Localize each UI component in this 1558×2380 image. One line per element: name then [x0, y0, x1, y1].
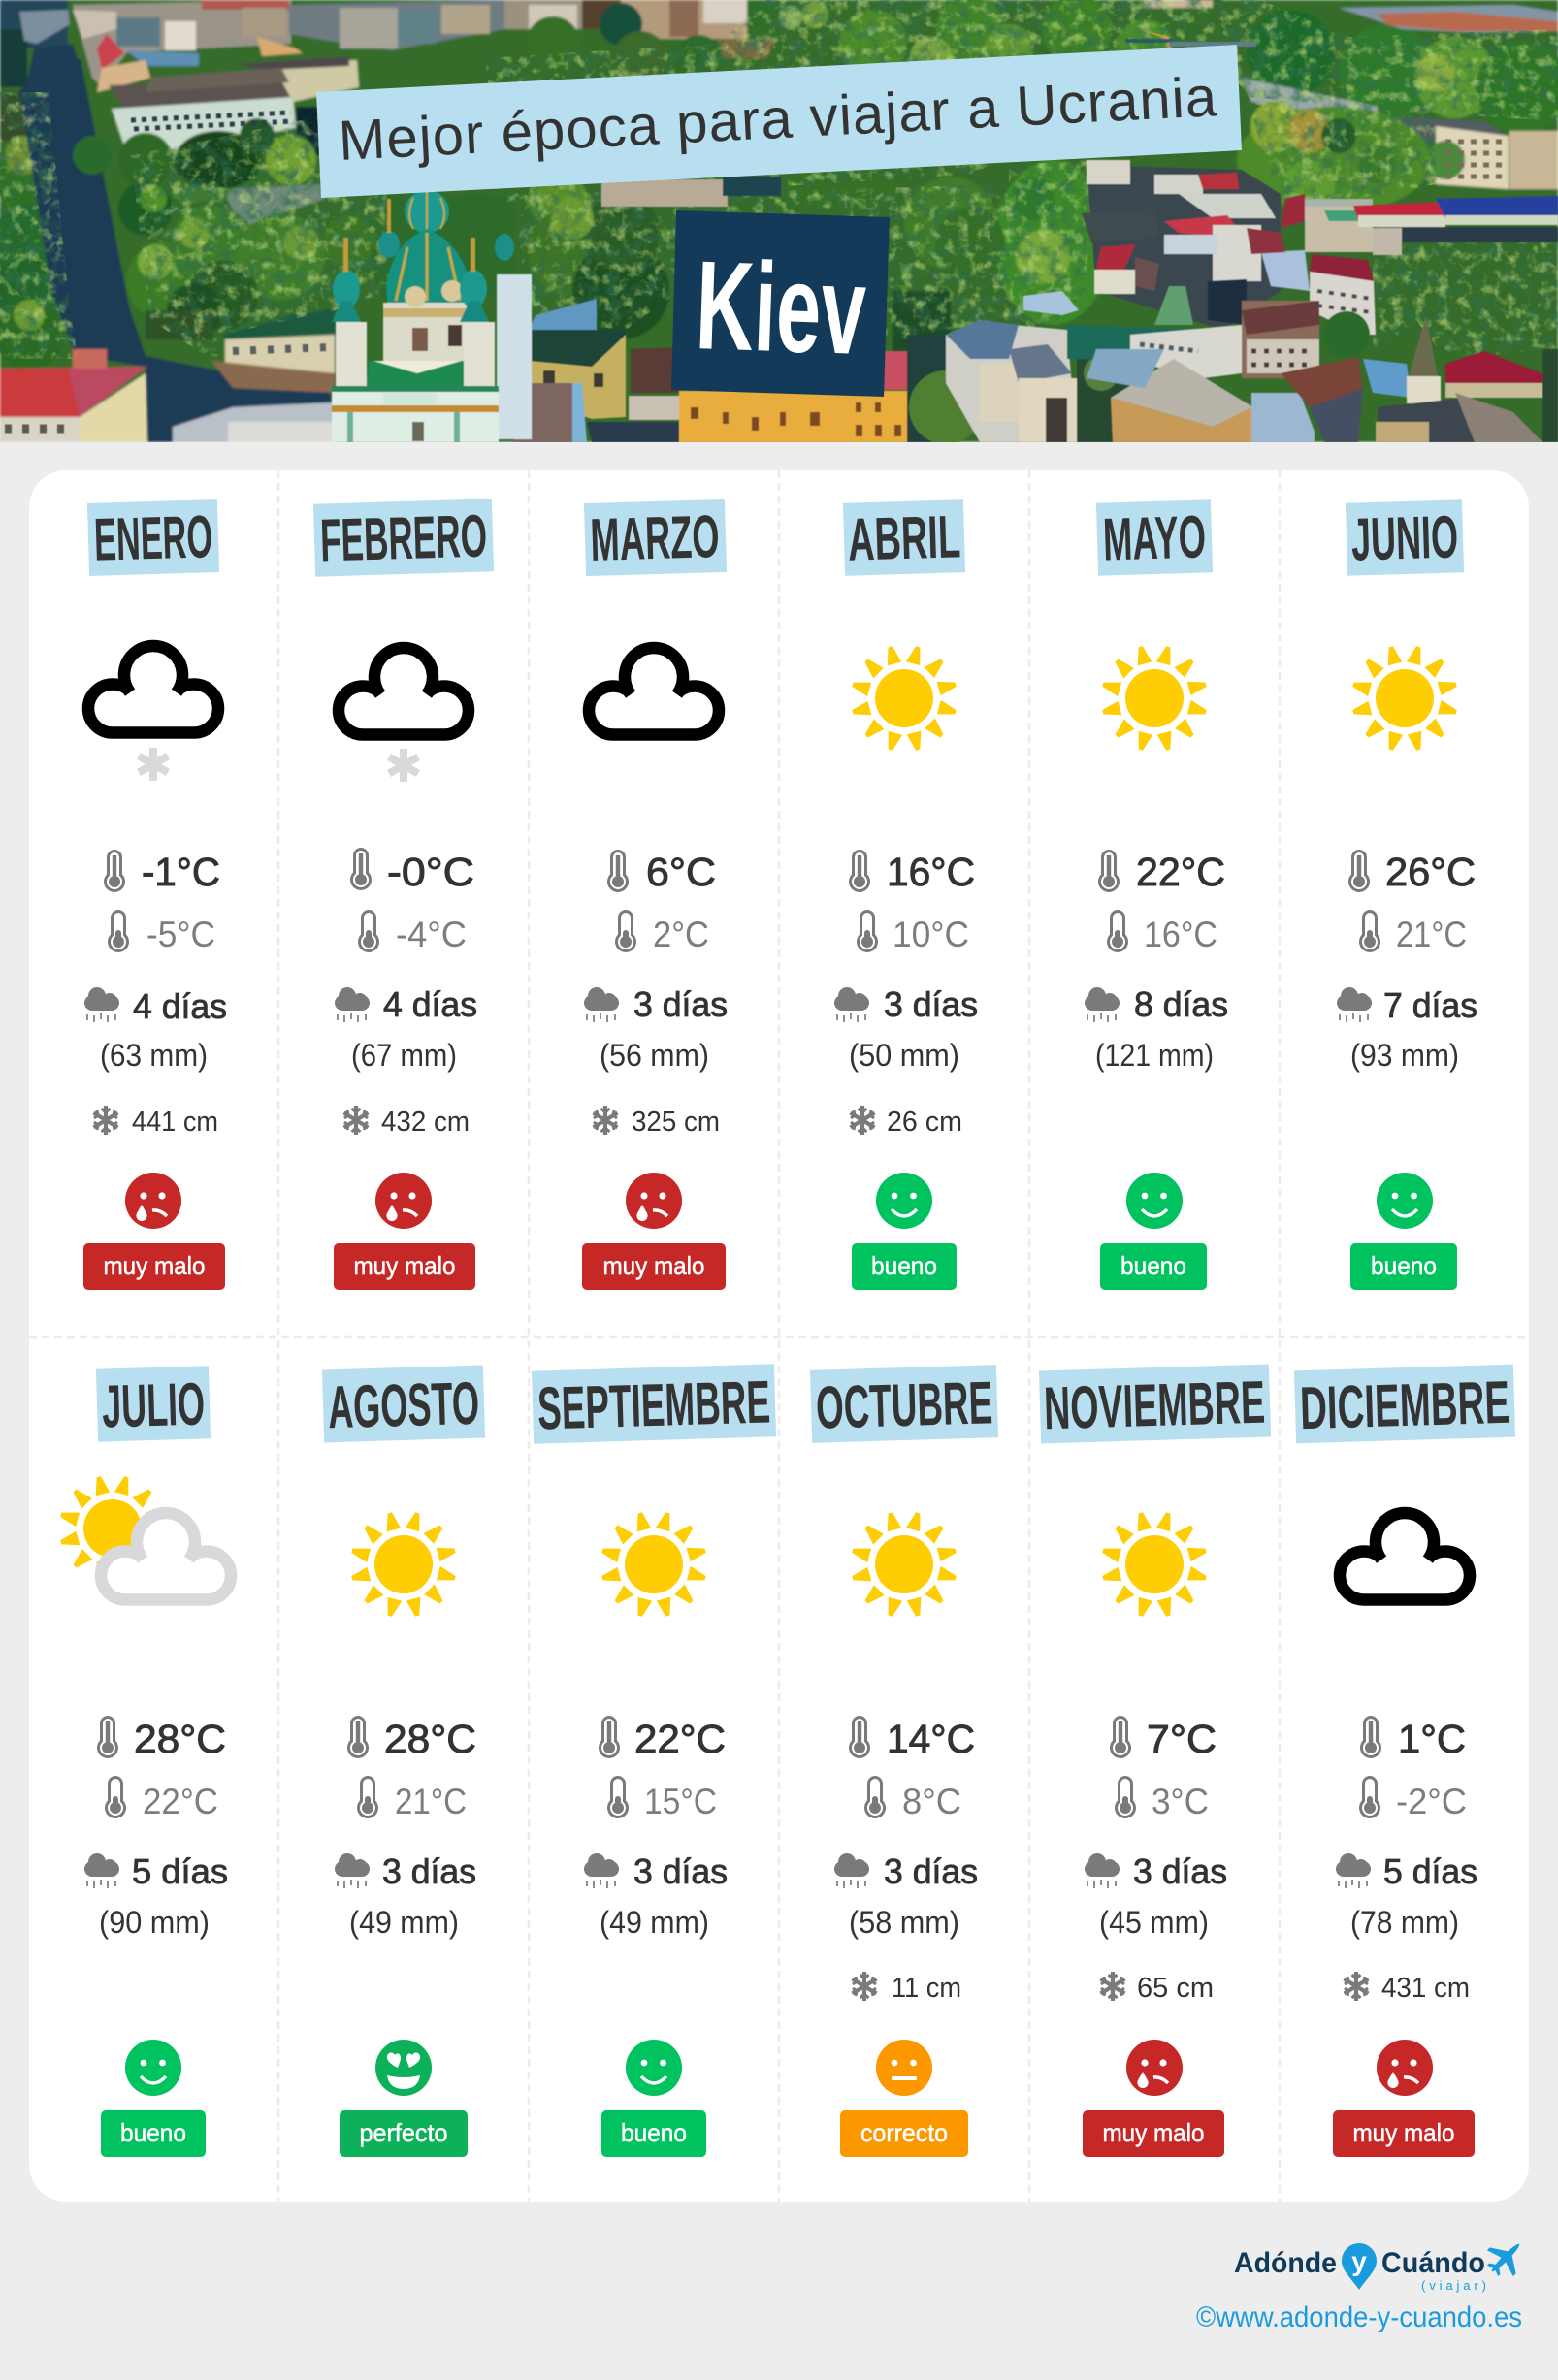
snowfall: 431 cm — [1381, 1973, 1470, 2004]
icon: cloud — [589, 648, 719, 735]
rating badge: bueno — [1120, 1251, 1186, 1280]
rating badge: muy malo — [1352, 2118, 1455, 2147]
icon: neutral face — [876, 2040, 932, 2096]
month label — [1039, 1364, 1271, 1443]
high temperature: 14°C — [887, 1717, 975, 1761]
icon: sun — [1101, 645, 1208, 752]
icon: crying face — [125, 1173, 181, 1229]
snowfall — [1345, 1972, 1470, 2004]
panel: enero — [83, 499, 227, 1290]
low temperature — [1359, 910, 1467, 954]
rainy days — [84, 986, 227, 1026]
low temperature — [108, 910, 215, 954]
high temperature — [1348, 850, 1476, 894]
low temperature — [357, 1776, 467, 1821]
high temperature: 28°C — [384, 1717, 476, 1761]
high temperature: -1°C — [142, 850, 220, 894]
month label — [313, 499, 494, 577]
rating badge: correcto — [860, 2118, 948, 2147]
month label — [1346, 499, 1464, 576]
high temperature: 28°C — [134, 1717, 226, 1761]
month label: NOVIEMBRE — [1043, 1369, 1266, 1442]
rating badge — [334, 1243, 475, 1290]
panel: febrero — [313, 499, 494, 1290]
rainy days — [1336, 1851, 1477, 1891]
month label: ABRIL — [847, 503, 961, 574]
rainy days: 5 días — [132, 1851, 228, 1891]
icon: sun — [851, 1511, 958, 1618]
high temperature: 6°C — [646, 850, 716, 894]
low temperature: 22°C — [143, 1782, 218, 1821]
icon: crying face — [375, 1173, 432, 1229]
high temperature: 1°C — [1398, 1717, 1466, 1761]
rainy days — [584, 1851, 728, 1891]
high temperature — [347, 1716, 476, 1761]
month label — [87, 499, 219, 576]
snowfall — [852, 1972, 961, 2004]
title banner — [316, 45, 1242, 198]
rainy days — [84, 1851, 228, 1891]
icon: location pin — [1342, 2243, 1377, 2290]
rainy days — [335, 1851, 476, 1891]
high temperature: 7°C — [1147, 1717, 1217, 1761]
rainy days: 3 días — [884, 984, 978, 1024]
rainfall: (49 mm) — [349, 1905, 459, 1940]
low temperature — [105, 1776, 218, 1821]
month label — [532, 1364, 776, 1444]
icon: snowy cloud — [339, 648, 469, 782]
rating badge: bueno — [1371, 1251, 1437, 1280]
rainy days: 3 días — [884, 1851, 978, 1891]
icon: smiling face — [125, 2040, 181, 2096]
icon: airplane — [1478, 2231, 1533, 2285]
rainy days — [1085, 1851, 1227, 1891]
snowfall: 441 cm — [132, 1107, 218, 1138]
icon: sun — [1101, 1511, 1208, 1618]
rainfall: (93 mm) — [1350, 1038, 1459, 1073]
month label: MAYO — [1102, 503, 1207, 574]
panel: noviembre — [1039, 1364, 1271, 2157]
low temperature: 8°C — [902, 1782, 961, 1821]
icon: crying face — [626, 1173, 682, 1229]
icon: location pin: y — [1351, 2246, 1367, 2276]
rating badge — [101, 2110, 206, 2157]
low temperature — [1115, 1776, 1209, 1821]
rating badge — [1100, 1243, 1207, 1290]
high temperature: -0°C — [387, 850, 474, 894]
rating badge — [840, 2110, 968, 2157]
rainfall: (90 mm) — [99, 1905, 210, 1940]
rating badge: muy malo — [1102, 2118, 1205, 2147]
low temperature: 15°C — [644, 1782, 717, 1821]
rainy days: 5 días — [1383, 1851, 1477, 1891]
month label: FEBRERO — [319, 502, 488, 575]
month label: OCTUBRE — [815, 1369, 993, 1442]
hero photo: aerial view of Kiev — [0, 0, 1558, 444]
logo: Adónde y Cuándo: Adónde — [1234, 2247, 1337, 2279]
high temperature — [97, 1716, 226, 1761]
logo: Adónde y Cuándo — [1234, 2231, 1533, 2293]
snowfall — [93, 1106, 218, 1138]
rainy days: 3 días — [633, 1851, 728, 1891]
high temperature — [607, 850, 716, 894]
month label — [810, 1365, 998, 1443]
rainy days — [584, 984, 728, 1024]
high temperature — [350, 848, 474, 894]
rating badge: bueno — [871, 1251, 937, 1280]
panel: agosto — [322, 1366, 485, 2157]
rating badge — [852, 1243, 957, 1290]
rainy days: 7 días — [1383, 985, 1477, 1025]
low temperature: 21°C — [395, 1782, 467, 1821]
low temperature — [864, 1776, 961, 1821]
month label: JUNIO — [1350, 503, 1459, 574]
high temperature: 26°C — [1385, 850, 1476, 894]
high temperature — [1098, 850, 1225, 894]
city label: Kiev — [671, 210, 890, 397]
rainy days — [335, 984, 477, 1024]
low temperature: -5°C — [146, 915, 215, 954]
logo: Adónde y Cuándo: (viajar) — [1421, 2278, 1486, 2293]
rating badge — [582, 1243, 726, 1290]
icon: sun behind cloud — [59, 1475, 231, 1600]
snowfall: 26 cm — [887, 1107, 962, 1138]
snowfall: 325 cm — [632, 1107, 720, 1138]
high temperature — [849, 1716, 975, 1761]
rainy days: 3 días — [382, 1851, 476, 1891]
panel: marzo — [582, 499, 728, 1290]
rainfall: (78 mm) — [1350, 1905, 1459, 1940]
low temperature: -2°C — [1396, 1782, 1467, 1821]
rating badge — [1350, 1243, 1457, 1290]
high temperature — [1110, 1716, 1217, 1761]
snowfall — [1100, 1972, 1214, 2004]
panel: octubre — [810, 1365, 998, 2157]
low temperature — [857, 910, 969, 954]
panel: calendar card — [29, 470, 1529, 2202]
icon: smiling face — [626, 2040, 682, 2096]
high temperature — [104, 850, 220, 894]
rainy days: 4 días — [133, 986, 227, 1026]
icon: sun — [851, 645, 958, 752]
rating badge — [340, 2110, 468, 2157]
snowfall — [594, 1106, 720, 1138]
low temperature: 2°C — [653, 915, 709, 954]
city label: Kiev: Kiev — [694, 234, 868, 381]
rating badge — [1083, 2110, 1224, 2157]
month label: SEPTIEMBRE — [536, 1368, 771, 1443]
rating badge: bueno — [120, 2118, 186, 2147]
low temperature: 10°C — [893, 915, 969, 954]
month label: ENERO — [93, 503, 213, 574]
high temperature: 22°C — [634, 1717, 726, 1761]
low temperature — [615, 910, 709, 954]
rating badge — [1333, 2110, 1475, 2157]
month label — [843, 499, 965, 576]
high temperature — [1360, 1716, 1466, 1761]
tree canopy texture — [0, 0, 1558, 364]
rainfall: (67 mm) — [351, 1038, 457, 1073]
logo: Adónde y Cuándo: Cuándo — [1381, 2247, 1485, 2279]
panel: abril — [834, 499, 978, 1290]
panel: junio — [1337, 499, 1477, 1290]
low temperature — [1107, 910, 1217, 954]
rainfall: (49 mm) — [600, 1905, 709, 1940]
low temperature: -4°C — [396, 915, 467, 954]
month label: MARZO — [590, 503, 721, 574]
title banner: Mejor época para viajar a Ucrania — [337, 65, 1218, 173]
month label — [322, 1366, 485, 1442]
icon: smiling face — [1126, 1173, 1183, 1229]
panel: julio — [59, 1366, 231, 2157]
rainy days: 4 días — [383, 984, 477, 1024]
rating badge — [601, 2110, 706, 2157]
snowfall: 432 cm — [381, 1107, 470, 1138]
rating badge — [83, 1243, 225, 1290]
snowfall — [850, 1106, 962, 1138]
month label: AGOSTO — [327, 1370, 480, 1441]
rainfall: (50 mm) — [849, 1038, 959, 1073]
rainy days — [834, 984, 978, 1024]
icon: smiling face — [876, 1173, 932, 1229]
rating badge: perfecto — [359, 2118, 448, 2147]
rainy days — [1337, 985, 1477, 1025]
month label — [96, 1366, 211, 1442]
icon: sun — [350, 1511, 457, 1618]
month label — [584, 499, 727, 576]
rating badge: muy malo — [603, 1251, 704, 1280]
icon: heart-eyes face — [375, 2040, 432, 2096]
snowfall: 65 cm — [1137, 1973, 1214, 2004]
icon: cloud — [1340, 1513, 1470, 1600]
panel: diciembre — [1294, 1365, 1515, 2157]
rainfall: (56 mm) — [600, 1038, 709, 1073]
rating badge: muy malo — [103, 1251, 206, 1280]
rainfall: (121 mm) — [1095, 1038, 1214, 1073]
low temperature — [1359, 1776, 1467, 1821]
high temperature — [599, 1716, 726, 1761]
low temperature: 21°C — [1396, 915, 1467, 954]
panel: septiembre — [532, 1364, 776, 2157]
high temperature: 16°C — [887, 850, 975, 894]
high temperature — [849, 850, 975, 894]
rating badge: muy malo — [353, 1251, 456, 1280]
low temperature: 3°C — [1152, 1782, 1209, 1821]
icon: crying face — [1377, 2040, 1433, 2096]
low temperature: 16°C — [1144, 915, 1217, 954]
icon: snowy cloud — [88, 646, 218, 781]
panel: mayo — [1085, 499, 1228, 1290]
rainfall: (63 mm) — [100, 1038, 208, 1073]
icon: sun — [600, 1511, 707, 1618]
month label — [1096, 499, 1213, 576]
high temperature: 22°C — [1136, 850, 1225, 894]
rating badge: bueno — [621, 2118, 687, 2147]
icon: crying face — [1126, 2040, 1183, 2096]
rainy days — [834, 1851, 978, 1891]
rainfall: (58 mm) — [849, 1905, 959, 1940]
icon: sun — [1351, 645, 1458, 752]
snowfall: 11 cm — [892, 1973, 961, 2004]
website credit: ©www.adonde-y-cuando.es — [1196, 2301, 1522, 2333]
rainfall: (45 mm) — [1099, 1905, 1209, 1940]
snowfall — [343, 1106, 470, 1138]
low temperature — [607, 1776, 717, 1821]
rainy days: 8 días — [1134, 984, 1228, 1024]
rainy days — [1085, 984, 1228, 1024]
rainy days: 3 días — [1133, 1851, 1227, 1891]
month label: JULIO — [101, 1370, 206, 1441]
icon: smiling face — [1377, 1173, 1433, 1229]
low temperature — [358, 910, 467, 954]
rainy days: 3 días — [633, 984, 728, 1024]
